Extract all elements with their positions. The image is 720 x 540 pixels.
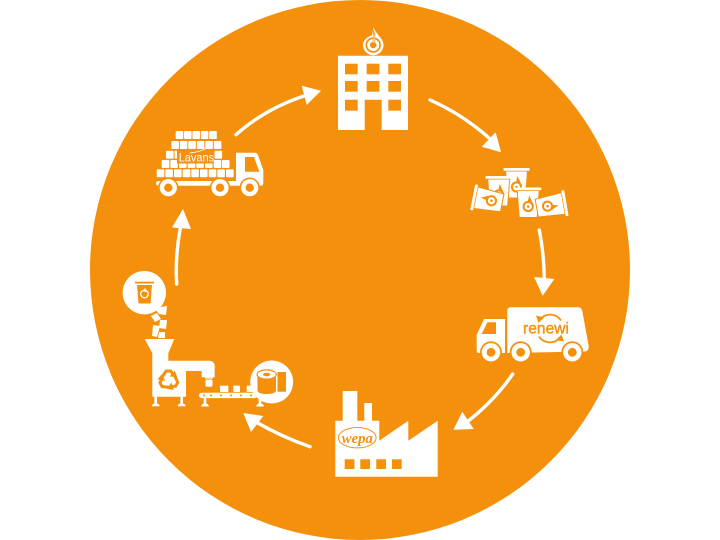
- arrow: truck to building: [236, 86, 321, 135]
- icon: recycling machine with conveyor: [123, 271, 293, 406]
- callout: cup: [123, 271, 166, 314]
- load of paper rolls: [157, 131, 234, 177]
- icon: renewi collection truck: [477, 307, 589, 363]
- arrow: machine to lavans truck: [172, 209, 191, 284]
- arrow: cups to renewi truck: [534, 230, 554, 296]
- truck wheels: [158, 178, 260, 198]
- arrow: renewi truck to factory: [453, 374, 513, 430]
- icon: pile of cups: [470, 168, 569, 221]
- truck cab and chassis: [156, 153, 263, 186]
- background circle: [90, 0, 630, 540]
- conveyor belt: [199, 386, 257, 398]
- callout: paper roll: [250, 360, 293, 404]
- arrow: factory to recycling machine: [243, 413, 310, 447]
- recycle symbol: [156, 370, 180, 392]
- arrow: building to cups: [430, 100, 501, 152]
- nozzle and falling item: [205, 377, 213, 387]
- machine legs: [152, 397, 264, 406]
- machine body: [145, 339, 215, 397]
- icon: office building with flame logo: [338, 27, 408, 130]
- icon: renewi collection truck: renewi: [523, 320, 569, 338]
- falling cup pieces: [151, 306, 167, 338]
- icon: wepa factory: wepa: [342, 431, 373, 447]
- icon: lavans delivery truck loaded with rolls: [156, 131, 263, 198]
- icon: wepa factory: [335, 391, 438, 477]
- Lavans label: Lavans: [179, 151, 214, 165]
